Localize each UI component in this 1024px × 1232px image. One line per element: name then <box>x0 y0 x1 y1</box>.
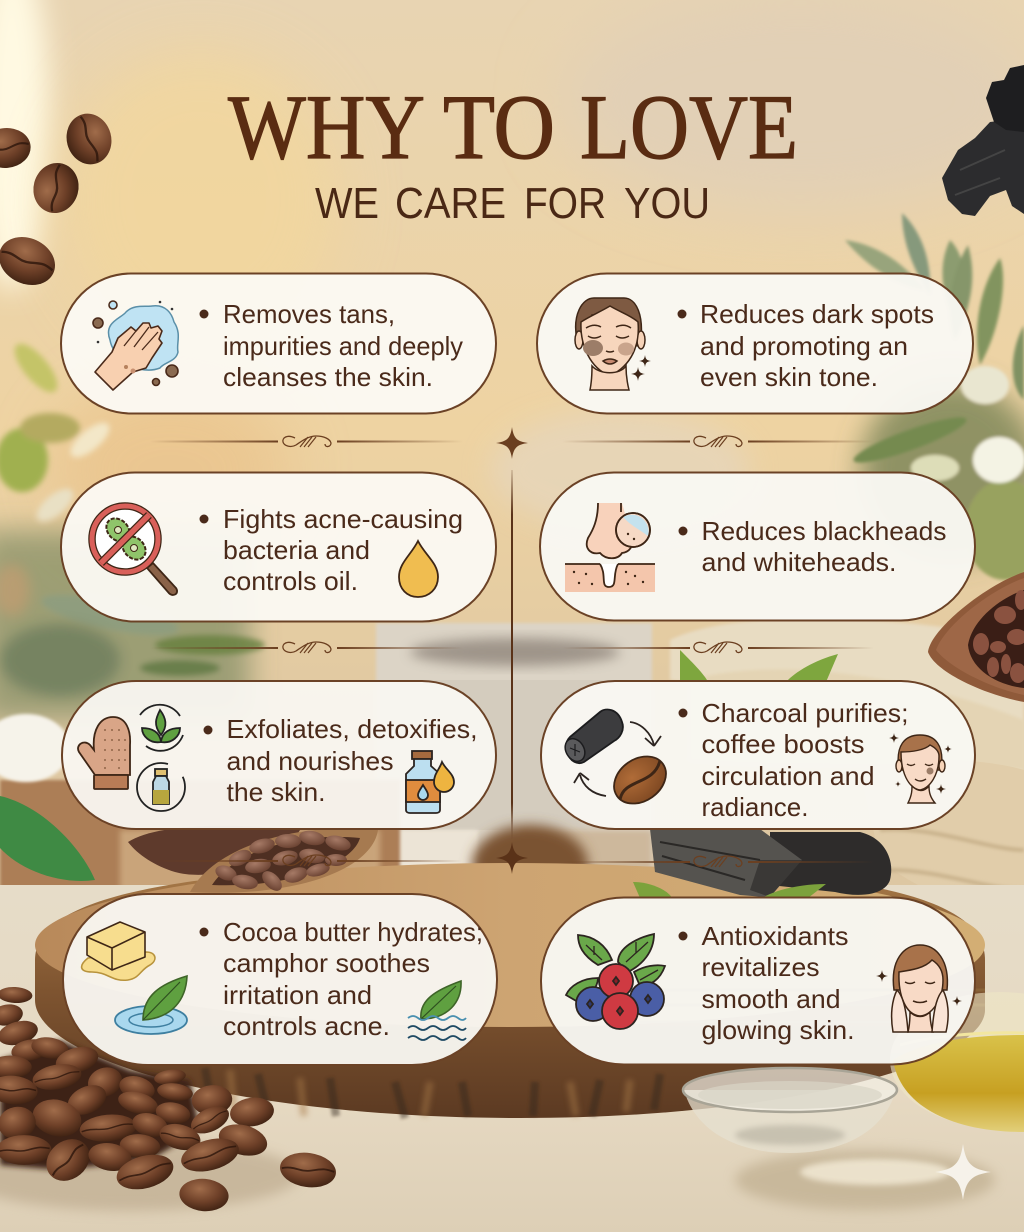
sparkle, bottom right <box>935 1144 991 1200</box>
text: controls acne. <box>223 1011 390 1041</box>
icon: sparkles <box>889 733 952 794</box>
text: even skin tone. <box>700 362 878 392</box>
icon: glowing face <box>896 735 945 803</box>
text: coffee boosts <box>702 729 864 759</box>
bullet <box>678 526 688 536</box>
plants left, blurred <box>0 337 265 720</box>
subtitle: FOR <box>524 179 606 228</box>
bullet <box>678 708 688 718</box>
icon: oil bottle with drop <box>406 751 454 813</box>
subtitle: WE <box>315 179 379 228</box>
text: and nourishes <box>226 746 394 776</box>
text: controls oil. <box>223 566 358 596</box>
cocoa pod, right edge <box>928 572 1024 702</box>
text: camphor soothes <box>223 948 430 978</box>
title <box>228 76 798 178</box>
text: and promoting an <box>700 331 908 361</box>
coffee beans, top left <box>0 109 117 294</box>
icon: sparkles <box>631 355 651 381</box>
icon: leaf cycle <box>140 705 183 751</box>
bullet <box>200 928 208 936</box>
icon: nose and pores <box>565 503 655 592</box>
text: smooth and <box>702 984 840 1014</box>
icon: butter <box>82 922 155 980</box>
divider row 3 left <box>150 855 463 866</box>
text: glowing skin. <box>702 1015 854 1045</box>
green leaf, left <box>0 796 95 881</box>
cocoa pod with beans, centre <box>190 828 378 894</box>
text: Cocoa butter hydrates; <box>223 917 483 947</box>
text: bacteria and <box>223 535 370 565</box>
text <box>702 516 946 577</box>
centre star ornament, upper <box>496 427 528 459</box>
text: the skin. <box>226 777 326 807</box>
text <box>700 299 934 392</box>
text: circulation and <box>702 761 874 791</box>
towels, right <box>670 618 1024 912</box>
subtitle <box>315 179 710 228</box>
text: irritation and <box>223 980 372 1010</box>
icon: oil drop <box>399 541 438 597</box>
panel: charcoal and coffee <box>541 681 975 829</box>
icon: bottle cycle <box>137 763 185 811</box>
oil bowl, right <box>890 992 1024 1132</box>
icon: charcoal to coffee cycle <box>561 709 675 813</box>
coffee beans pile, bottom left <box>0 986 338 1213</box>
panel: blackheads <box>540 472 975 620</box>
panel: removes tans <box>61 274 496 414</box>
centre star ornament, lower <box>496 842 528 874</box>
icon: face with dark spots <box>575 298 645 390</box>
icon: leaf with waves <box>408 981 466 1040</box>
text: cleanses the skin. <box>223 362 433 392</box>
panel: fights acne <box>61 472 496 622</box>
jar, blurred, centre <box>376 623 652 965</box>
bullet <box>204 726 212 734</box>
floor <box>0 885 1024 1232</box>
icon: sparkles <box>876 970 962 1006</box>
text: Exfoliates, detoxifies, <box>226 714 478 744</box>
text <box>702 921 854 1045</box>
panel: exfoliates <box>62 681 496 829</box>
subtitle: YOU <box>624 179 710 228</box>
plants right, blurred <box>845 213 1024 580</box>
divider row 1 left <box>150 436 463 447</box>
panel: dark spots <box>537 274 973 414</box>
text: Reduces dark spots <box>700 299 934 329</box>
title: WHY <box>228 76 425 178</box>
icon: washing hand with foam <box>93 301 178 390</box>
text: Antioxidants <box>702 921 848 951</box>
divider row 2 right <box>562 642 874 653</box>
icon: no bacteria magnifier <box>92 506 177 595</box>
text <box>226 714 478 807</box>
text: Charcoal purifies; <box>702 698 908 728</box>
text: revitalizes <box>702 952 820 982</box>
bullet <box>200 310 208 318</box>
title: TO <box>443 76 555 178</box>
icon: berries and leaves <box>566 934 665 1029</box>
text: impurities and deeply <box>223 331 463 361</box>
divider row 2 left <box>150 642 463 653</box>
centre vertical line <box>511 470 513 840</box>
left bowl and white fluff <box>0 714 400 890</box>
charcoal pile, centre right <box>633 650 891 898</box>
charcoal, top right <box>942 65 1024 216</box>
icon: exfoliating mitt <box>78 717 130 789</box>
panel: antioxidants <box>541 898 975 1064</box>
panel: cocoa butter <box>63 894 497 1065</box>
text <box>702 698 908 822</box>
bullet <box>678 932 688 940</box>
title: LOVE <box>580 76 798 178</box>
text <box>223 917 483 1041</box>
text <box>223 504 463 596</box>
text <box>223 299 463 392</box>
wooden slab <box>35 863 985 1118</box>
bullet <box>678 310 686 318</box>
icon: leaf in water <box>115 976 187 1034</box>
divider row 3 right <box>562 856 874 867</box>
text: Removes tans, <box>223 299 395 329</box>
text: Fights acne-causing <box>223 504 463 534</box>
icon: woman touching face <box>892 945 948 1032</box>
text: and whiteheads. <box>702 547 896 577</box>
divider row 1 right <box>562 436 874 447</box>
bullet <box>200 514 208 524</box>
subtitle: CARE <box>395 179 506 228</box>
glass bowl <box>683 1068 995 1210</box>
text: Reduces blackheads <box>702 516 946 546</box>
text: radiance. <box>702 792 808 822</box>
cocoa pod, centre back <box>128 826 300 875</box>
